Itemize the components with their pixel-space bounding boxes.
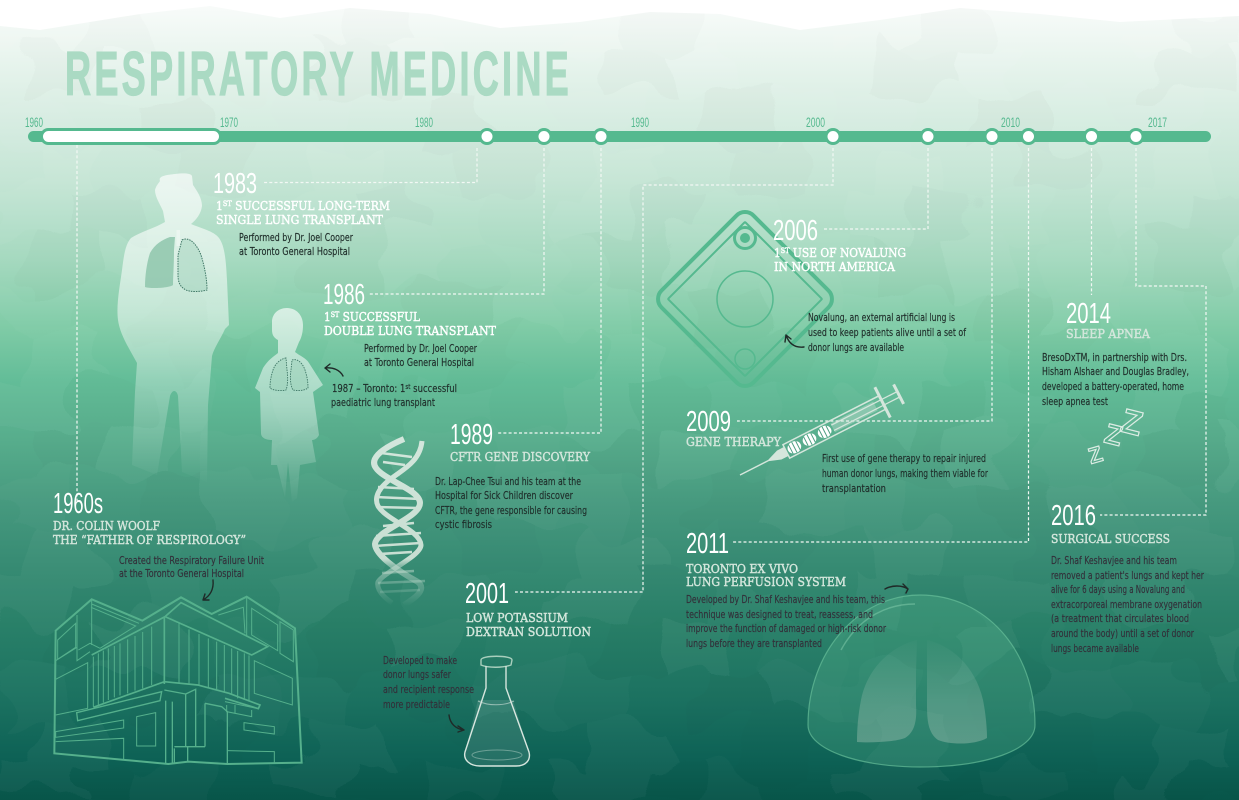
timeline year labels: 2010 [1001,115,1020,130]
event: 2014: 2014 [1066,298,1111,330]
event: 1989: 1989 [450,419,493,451]
event: 1983: ST [223,199,232,208]
event: 2009: human donor lungs, making them viable for [822,468,988,480]
icon: flask [465,656,529,766]
event: 2011: technique was designed to treat, reassess, and [686,609,873,621]
event: 1989: CFTR GENE DISCOVERY [450,449,591,464]
event: 2016: lungs became available [1051,643,1139,655]
event: 1986: 1986 [323,279,365,311]
timeline year labels: 2000 [806,115,825,130]
event: 1986: paediatric lung transplant [331,397,435,409]
event: 2011: Developed by Dr. Shaf Keshavjee and his team, this [686,594,885,606]
event: 2001: DEXTRAN SOLUTION [466,624,591,639]
event: 1960s: DR. COLIN WOOLF [53,518,160,533]
arrow: to dome [885,584,908,593]
event: 2014 [1042,298,1189,408]
event: 2016: Dr. Shaf Keshavjee and his team [1051,555,1177,567]
event: 2011: improve the function of damaged or high-risk donor [686,623,886,635]
event: 1960s [53,488,264,580]
event: 2009: First use of gene therapy to repair injured [822,453,986,465]
event: 2009: GENE THERAPY [686,434,782,449]
event: 1960s: Created the Respiratory Failure Unit [119,555,264,567]
milestone nodes [480,130,1143,144]
event: 2006 [773,215,966,354]
icon: syringe with DNA [732,379,906,490]
event: 1986: DOUBLE LUNG TRANSPLANT [324,323,497,338]
icon: sleep Z letters [1085,402,1146,469]
icon: sleep Z letters: Z [1117,402,1146,444]
event: 2011: 2011 [686,528,729,560]
event: 1960s: at the Toronto General Hospital [119,568,244,580]
event: 1986: at Toronto General Hospital [364,357,474,369]
event: 1989: Hospital for Sick Children discover [435,490,574,502]
event: 1986: successful [410,383,457,395]
event: 2001: LOW POTASSIUM [466,610,568,625]
event: 1983: Performed by Dr. Joel Cooper [239,232,354,244]
highlighted 1960s span [42,130,220,144]
event: 1986: 1987 – Toronto: 1 [332,383,423,395]
event: 2014: Hisham Alshaer and Douglas Bradley, [1042,366,1189,378]
event: 2001: 2001 [465,578,509,610]
event: 2009: 2009 [686,406,731,438]
event: 2006: ST [781,246,789,255]
title: RESPIRATORY MEDICINE [65,40,572,109]
event: 1983: 1983 [213,168,257,200]
event: 2006: donor lungs are available [808,342,904,354]
event: 1983 [213,168,390,258]
icon: sleep Z letters: Z [1102,418,1126,452]
event: 1960s: THE “FATHER OF RESPIROLOGY” [53,532,246,547]
timeline year labels: 1980 [415,115,433,130]
timeline year labels: 1960 [25,115,43,130]
event: 2016: SURGICAL SUCCESS [1051,531,1170,546]
event: 2006: 1 [774,245,782,260]
timeline year labels: 2017 [1148,115,1167,130]
event: 2011 [686,528,886,650]
icon: child silhouette with lungs [255,308,323,502]
event: 2006: Novalung, an external artificial lung is [808,312,955,324]
timeline year labels: 1970 [220,115,238,130]
timeline [28,130,1211,144]
arrow: to flask [449,715,464,732]
event: 2011: LUNG PERFUSION SYSTEM [686,574,846,589]
event: 2016: (a treatment that circulates blood [1051,613,1189,625]
event: 2001 [383,578,591,711]
event: 1989: Dr. Lap-Chee Tsui and his team at the [435,476,581,488]
event: 1986 [323,279,497,409]
dashed connector lines [77,145,1206,592]
arrow: to Novalung [785,335,804,347]
event: 1986: ST [331,310,339,319]
icon: hospital building [54,597,302,764]
icon: glass dome with lungs [808,595,1035,767]
event: 1986: Performed by Dr. Joel Cooper [364,343,478,355]
event: 1983: at Toronto General Hospital [239,246,350,258]
event: 2014: BresoDxTM, in partnership with Drs. [1042,352,1187,364]
icon: DNA helix [374,439,425,605]
event: 2009: transplantation [822,483,886,495]
event: 1983: SUCCESSFUL LONG-TERM [232,198,390,213]
event: 2009 [686,406,988,495]
event: 2001: and recipient response [383,684,474,696]
event: 2006: used to keep patients alive until a set of [808,327,966,339]
event: 1986: 1 [324,309,332,324]
event: 1986: st [405,383,411,391]
event: 2014: sleep apnea test [1042,396,1108,408]
event: 1989: cystic fibrosis [435,519,492,531]
event: 2014: SLEEP APNEA [1066,326,1151,341]
event: 2016 [1051,500,1205,655]
arrow: to hospital [203,580,213,600]
event: 1983: 1 [216,198,224,213]
icon: sleep Z letters: Z [1085,441,1105,469]
icon: adult silhouette with lungs [117,173,229,482]
event: 1986: SUCCESSFUL [339,309,420,324]
event: 1960s: 1960s [53,488,103,520]
event: 2001: Developed to make [383,655,457,667]
event: 2014: developed a battery-operated, home [1042,381,1184,393]
arrow: 1987 note to child [325,364,343,376]
event: 2006: USE OF NOVALUNG [789,245,906,260]
event: 1989 [435,419,591,531]
event: 2001: donor lungs safer [383,669,452,681]
event: 1989: CFTR, the gene responsible for causing [435,505,587,517]
event: 2001: more predictable [383,699,450,711]
event: 2011: lungs before they are transplanted [686,638,822,650]
timeline year labels [25,115,1167,130]
event: 2016: 2016 [1051,500,1096,532]
event: 1983: SINGLE LUNG TRANSPLANT [216,212,384,227]
event: 2006: IN NORTH AMERICA [774,259,896,274]
icon: Novalung device [653,207,837,391]
event: 2011: TORONTO EX VIVO [686,561,798,576]
event: 2006: 2006 [773,215,818,247]
timeline year labels: 1990 [631,115,649,130]
